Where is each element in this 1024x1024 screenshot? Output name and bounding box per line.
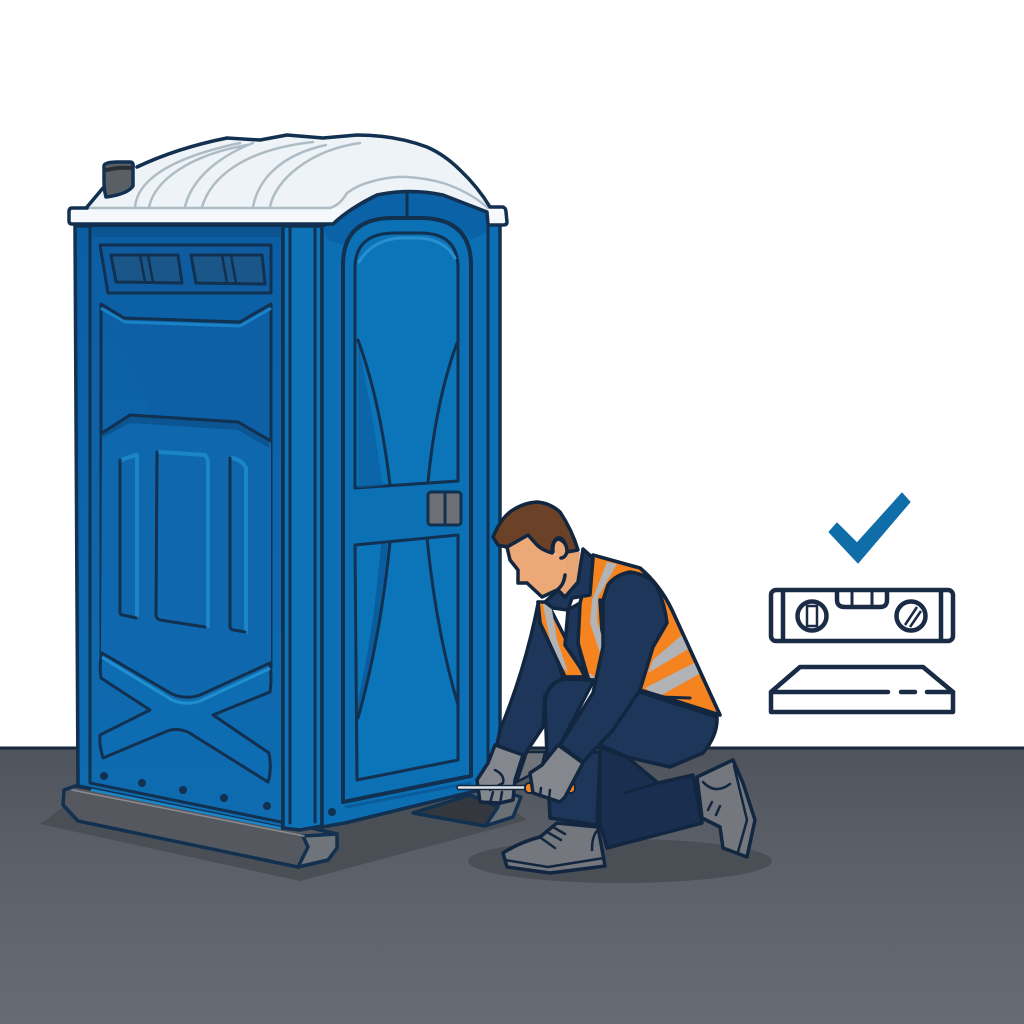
left glove — [477, 745, 523, 804]
door wall — [322, 192, 500, 827]
X brace — [100, 653, 271, 782]
corner post — [283, 226, 322, 830]
person shadow — [468, 839, 772, 883]
roof — [69, 135, 507, 225]
shirt front — [565, 603, 586, 676]
upper wall panel — [101, 304, 271, 693]
screwdriver — [457, 783, 575, 793]
reflective stripes — [543, 562, 701, 697]
rear boot — [697, 760, 755, 857]
rivets — [100, 772, 271, 810]
vent panel — [100, 245, 271, 293]
right glove — [530, 745, 583, 802]
portable toilet shadow — [40, 800, 527, 881]
worker — [457, 502, 755, 873]
icon: spirit level — [771, 590, 953, 641]
level status group — [771, 493, 953, 712]
rear skid — [413, 790, 521, 826]
vest — [538, 555, 720, 715]
back arm — [497, 604, 563, 757]
front boot — [503, 823, 605, 873]
hair and ear — [493, 502, 578, 558]
roof ribs — [88, 142, 488, 208]
ground — [0, 746, 1024, 1024]
neck and face — [507, 535, 580, 597]
skid base — [63, 786, 337, 867]
roof outline — [69, 135, 507, 225]
front leg — [545, 679, 600, 825]
icon: check mark — [829, 493, 910, 563]
door handle — [428, 492, 461, 525]
hips and rear thigh — [590, 692, 717, 767]
rear shin — [600, 747, 702, 848]
collar — [545, 549, 593, 610]
icon: level slab — [771, 667, 953, 712]
door — [343, 218, 471, 807]
ground seen between arms — [517, 752, 545, 782]
left wall — [75, 226, 283, 828]
recessed wall ribs — [120, 452, 246, 632]
door lower panel — [355, 535, 458, 780]
front arm — [560, 572, 667, 762]
portable toilet — [63, 135, 521, 867]
roof vent — [104, 162, 133, 197]
door upper panel — [355, 233, 458, 488]
